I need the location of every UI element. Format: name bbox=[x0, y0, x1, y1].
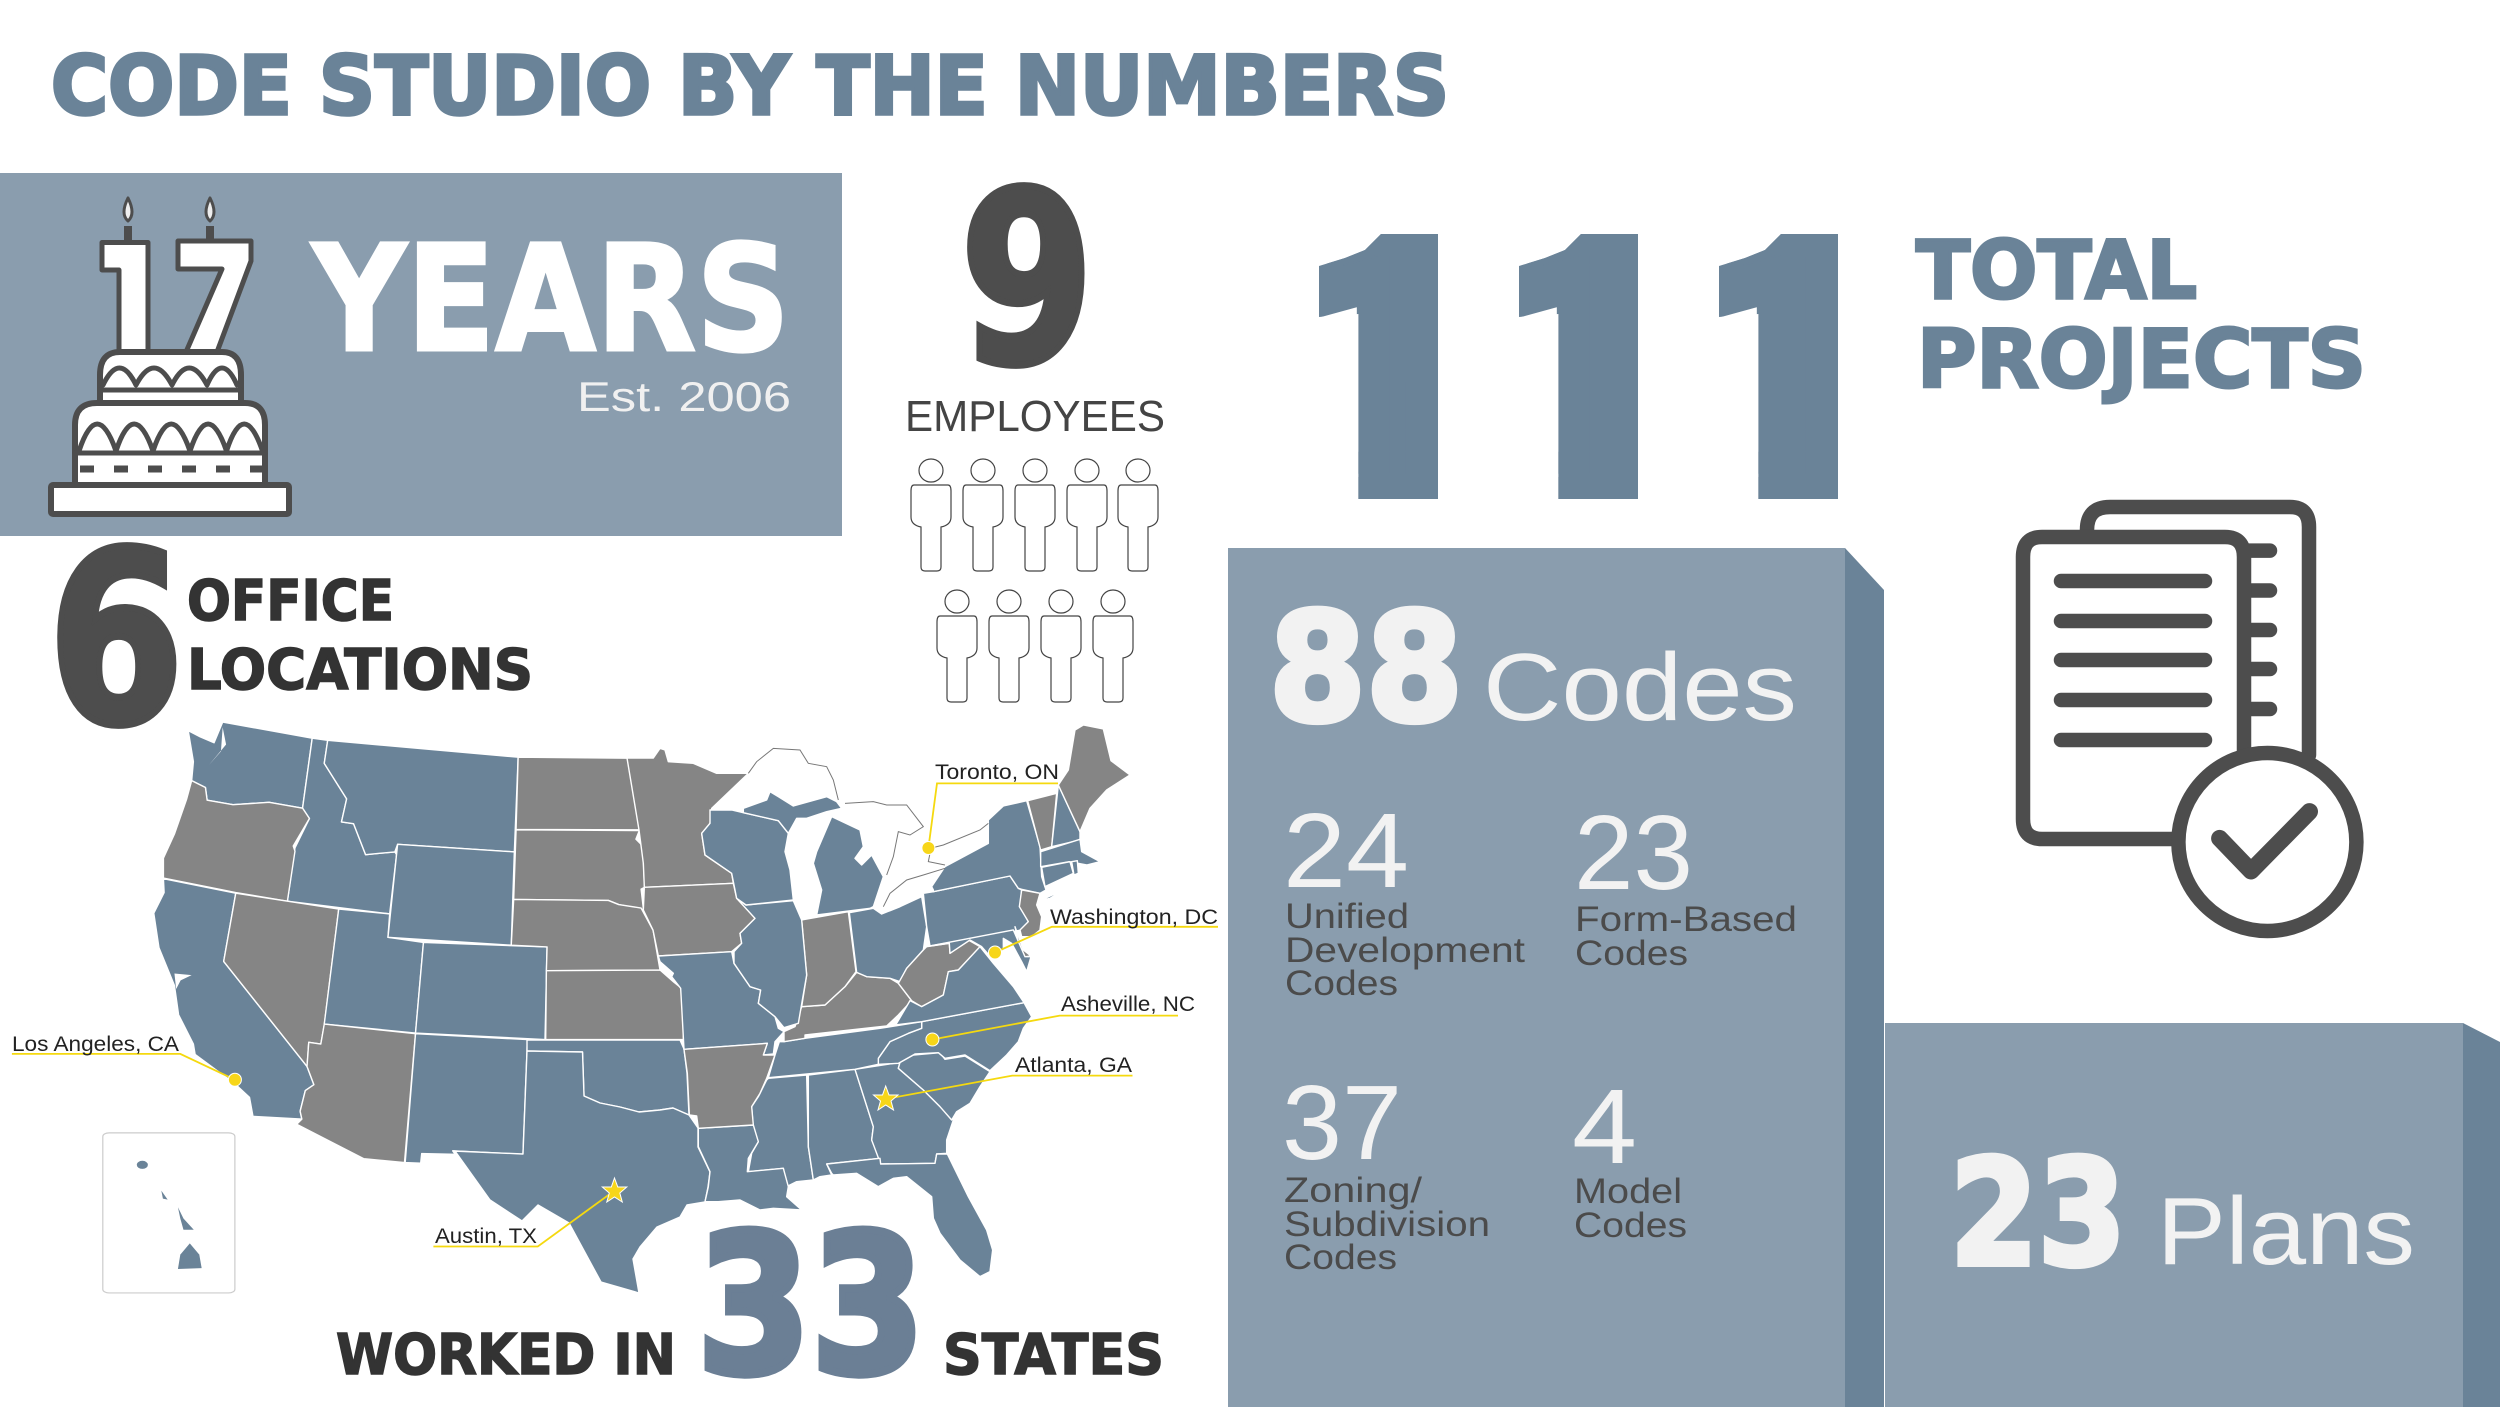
office locations label: LOCATIONS bbox=[187, 638, 533, 703]
callout: Washington: Washington, DC bbox=[1050, 906, 1218, 929]
stat: model codes: Codes bbox=[1574, 1206, 1687, 1245]
stat: form-based codes bbox=[1574, 794, 1797, 973]
title: CODE STUDIO BY THE NUMBERS bbox=[51, 40, 1449, 134]
stat: zoning/subdivision codes bbox=[1282, 1064, 1490, 1277]
callout: Austin bbox=[433, 1178, 627, 1248]
employees count: 9 bbox=[960, 142, 1094, 419]
stat: unified development codes: Codes bbox=[1285, 964, 1398, 1003]
stat: zoning/subdivision codes: Codes bbox=[1284, 1238, 1397, 1277]
callout: Asheville: Asheville, NC bbox=[1061, 993, 1195, 1016]
total projects count: 1 bbox=[1696, 161, 1886, 585]
total codes number: 88 bbox=[1269, 582, 1463, 756]
callout: Toronto: Toronto, ON bbox=[935, 761, 1059, 784]
callout: Asheville bbox=[926, 993, 1195, 1046]
codes label: Codes bbox=[1483, 634, 1797, 741]
office locations label bbox=[187, 569, 533, 703]
callout: Los Angeles bbox=[12, 1033, 241, 1086]
panel: plans bbox=[1885, 1023, 2500, 1407]
chart: map of the United States bbox=[103, 722, 1130, 1293]
total projects count bbox=[1319, 234, 1838, 499]
office count: 6 bbox=[48, 502, 184, 779]
stat: model codes: 4 bbox=[1572, 1068, 1637, 1186]
worked in label: WORKED IN bbox=[336, 1323, 676, 1388]
total projects label bbox=[1916, 224, 2366, 406]
icon: nine employee figures bbox=[911, 459, 1158, 702]
stat: model codes: Model bbox=[1574, 1172, 1682, 1211]
icon: birthday cake with 17 candles bbox=[51, 198, 289, 514]
stat: zoning/subdivision codes: Zoning/ bbox=[1284, 1171, 1422, 1210]
icon: documents with check mark bbox=[2023, 507, 2356, 931]
callout: Toronto bbox=[922, 761, 1059, 854]
stat: form-based codes: Codes bbox=[1575, 934, 1688, 973]
stat: unified development codes: 24 bbox=[1283, 792, 1409, 910]
Great Lakes outlines bbox=[748, 748, 988, 907]
stat: model codes bbox=[1572, 1068, 1687, 1245]
total projects count: 1 bbox=[1496, 161, 1686, 585]
employees label: EMPLOYEES bbox=[905, 392, 1165, 441]
stat: form-based codes: 23 bbox=[1574, 794, 1693, 912]
map states: Oklahoma and Texas bbox=[453, 1040, 710, 1293]
states label: STATES bbox=[943, 1323, 1164, 1388]
callout: Austin: Austin, TX bbox=[435, 1225, 537, 1248]
panel: codes bbox=[1228, 548, 1884, 1407]
callout: Atlanta bbox=[874, 1054, 1132, 1110]
stat: zoning/subdivision codes: Subdivision bbox=[1284, 1205, 1490, 1244]
office locations label: OFFICE bbox=[187, 569, 394, 634]
years heading: YEARS bbox=[310, 214, 790, 385]
plans label: Plans bbox=[2157, 1178, 2415, 1285]
established year: Est. 2006 bbox=[577, 373, 791, 420]
stat: unified development codes: Unified bbox=[1285, 897, 1409, 936]
stat: form-based codes: Form-Based bbox=[1575, 900, 1797, 939]
callout: Washington bbox=[988, 906, 1218, 959]
stat: unified development codes bbox=[1283, 792, 1525, 1003]
map states: south bbox=[698, 1053, 993, 1277]
plans number: 23 bbox=[1950, 1129, 2126, 1299]
total projects label: TOTAL bbox=[1916, 224, 2197, 317]
worked in 33 states bbox=[336, 1195, 1164, 1407]
callout: Los Angeles: Los Angeles, CA bbox=[12, 1033, 179, 1056]
map states: midwest and northeast bbox=[627, 725, 1130, 1128]
map callouts bbox=[12, 761, 1218, 1248]
stat: zoning/subdivision codes: 37 bbox=[1282, 1064, 1402, 1182]
Hawaii inset bbox=[103, 1133, 235, 1293]
callout: Atlanta: Atlanta, GA bbox=[1015, 1054, 1132, 1077]
map states: west bbox=[154, 722, 683, 1163]
panel: years bbox=[0, 173, 842, 536]
stat: unified development codes: Development bbox=[1285, 931, 1525, 970]
total projects count: 1 bbox=[1296, 161, 1486, 585]
total projects label: PROJECTS bbox=[1917, 313, 2366, 406]
